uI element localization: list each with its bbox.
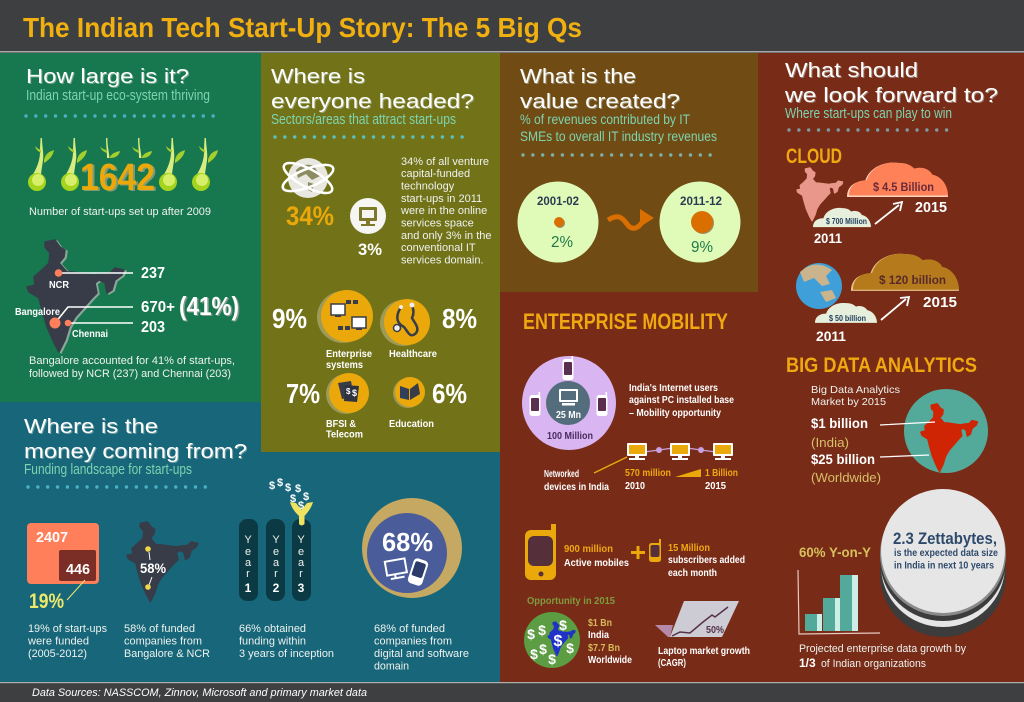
footer: data sources — [0, 682, 1024, 702]
heading: money — [24, 415, 247, 463]
chart: world cloud market: $ 50 billion — [829, 314, 866, 323]
dotted divider — [26, 114, 214, 118]
icon: funnel with dollars: $ — [303, 491, 309, 503]
text: big data market: (India) — [811, 435, 849, 450]
sector: education — [389, 377, 467, 430]
stat: 3 percent: 3% — [358, 240, 382, 259]
chart: year pills: Y — [244, 534, 252, 546]
dotted divider — [789, 128, 949, 132]
chart: funded share — [27, 523, 99, 613]
chart: networked devices: 2010 — [625, 480, 645, 492]
chart: year pills: a — [298, 557, 305, 569]
chart: networked devices: devices in India — [544, 481, 609, 493]
chart: 2001-02 circle: 2001-02 — [537, 194, 579, 208]
chart: internet users circle — [522, 356, 616, 450]
stat: opportunity figures — [588, 617, 632, 666]
stat: subscribers — [668, 542, 745, 579]
chart: networked devices — [544, 443, 738, 493]
sector: enterprise systems: 9% — [272, 303, 307, 334]
text: funding captions: (2005-2012) — [28, 648, 87, 660]
chart: 2011-12 circle: 2011-12 — [680, 194, 722, 208]
chart: year pills — [239, 519, 311, 601]
text: projected growth: Projected enterprise data growth by — [799, 643, 966, 655]
chart: year pills: 1 — [245, 581, 252, 595]
chart: networked devices: Networked — [544, 468, 579, 480]
sector: bfsi and telecom: $ — [352, 388, 357, 398]
stat: active mobiles: Active mobiles — [564, 557, 629, 569]
map: india hubs: (41%) — [179, 291, 239, 321]
icon: funnel with dollars: $ — [298, 500, 304, 512]
panel: where is the money coming from — [0, 402, 500, 683]
icon: green dollar globe: $ — [530, 646, 538, 662]
icon: monitor — [350, 198, 386, 234]
subtitle: Funding landscape for start-ups — [24, 461, 192, 478]
panel: what is the value created — [500, 53, 758, 292]
heading: forward — [784, 59, 998, 107]
subtitle: SMEs to overall IT industry revenues — [520, 128, 717, 144]
sector: bfsi and telecom: 7% — [286, 378, 320, 409]
icon: green dollar globe: $ — [548, 651, 556, 667]
dotted divider — [275, 135, 463, 139]
heading: headed — [271, 65, 474, 113]
icon: green dollar globe: $ — [539, 641, 547, 657]
map: bangalore and ncr: 58% — [140, 560, 167, 576]
chart: india cloud market: $ 700 Million — [826, 217, 867, 226]
text: online services: conventional IT — [401, 242, 476, 254]
chart: funded share: 446 — [66, 561, 90, 578]
text: funding captions: 19% of start-ups — [28, 623, 107, 635]
map: india hubs: 670+ — [141, 299, 175, 316]
text: internet vs pc: India's Internet users — [629, 382, 718, 394]
text: big data market: $25 billion — [811, 451, 875, 467]
heading: headed: Where is — [271, 65, 365, 88]
chart: year pills: e — [273, 546, 279, 558]
sector: enterprise systems: systems — [326, 359, 363, 371]
chart: networked devices: 1 Billion — [705, 468, 738, 479]
heading: headed: everyone headed? — [271, 90, 474, 113]
chart: world cloud market: $ 120 billion — [879, 273, 946, 287]
caption: laptop market — [658, 645, 750, 669]
text: big data market: $1 billion — [811, 415, 868, 431]
heading: how large: How large is it? — [26, 65, 189, 88]
heading: cloud: CLOUD — [786, 145, 842, 168]
text: internet vs pc: against PC installed base — [629, 394, 734, 406]
text: online services: services domain. — [401, 254, 484, 266]
big number 1642: 1642 — [80, 157, 155, 199]
stat: opportunity figures: $1 Bn — [588, 617, 612, 629]
text: funding captions: companies from — [374, 636, 452, 648]
text: projected growth — [799, 643, 966, 670]
heading: value: value created? — [520, 90, 680, 113]
stat: opportunity figures: $7.7 Bn — [588, 642, 620, 654]
text: big data market: (Worldwide) — [811, 470, 881, 485]
icon: laptop growth: 50% — [706, 624, 725, 636]
icon: funnel with dollars: $ — [269, 480, 275, 492]
heading: forward: we look forward to? — [784, 84, 998, 107]
icon: laptop growth — [655, 601, 739, 637]
chart: internet users circle: 25 Mn — [556, 409, 581, 421]
text: funding captions: Bangalore & NCR — [124, 648, 210, 660]
chart: 2011-12 circle: 9% — [691, 239, 713, 256]
chart: zettabyte disc stack: is the expected data size — [894, 548, 998, 559]
panel: enterprise mobility — [500, 292, 758, 683]
chart: enterprise data growth: 60% Y-on-Y — [799, 544, 872, 560]
title bar — [0, 0, 1024, 52]
subtitle: Where start-ups can play to win — [785, 105, 952, 122]
text: online services: capital-funded — [401, 168, 470, 180]
text: funding captions: funding within — [239, 636, 306, 648]
text: bangalore share: followed by NCR (237) and Chennai (203) — [29, 368, 231, 380]
chart: year pills: 2 — [273, 581, 280, 595]
chart: 68 percent circle: 68% — [382, 527, 433, 557]
icon: plus — [631, 546, 645, 559]
heading: big data: BIG DATA ANALYTICS — [786, 354, 977, 377]
sector: enterprise systems — [272, 290, 373, 371]
chart: networked devices: 2015 — [705, 480, 726, 492]
chart: zettabyte disc stack: in India in next 10 years — [894, 560, 994, 572]
text: online services: start-ups in 2011 — [401, 193, 482, 205]
text: projected growth: 1/3 — [799, 656, 816, 670]
sector: healthcare — [380, 299, 477, 360]
chart: year pills: r — [246, 568, 250, 580]
icon: small mobile — [649, 539, 661, 562]
map: india hubs: 203 — [141, 319, 165, 336]
sector: education: Education — [389, 418, 434, 430]
chart: india cloud market: 2015 — [915, 199, 947, 216]
chart: year pills: 3 — [298, 581, 305, 595]
text: funding captions: were funded — [27, 636, 89, 648]
chart: 68 percent circle — [362, 498, 462, 598]
chart: india cloud market — [797, 163, 948, 246]
chart: world cloud market: 2011 — [816, 328, 846, 344]
text: online services: 34% of all venture — [401, 156, 489, 168]
sector: education: 6% — [432, 378, 467, 409]
big number 1642: 1642 — [82, 158, 157, 200]
chart: 2001-02 circle: 2% — [551, 234, 573, 251]
icon: funnel with dollars: $ — [277, 477, 283, 489]
chart: year pills: Y — [297, 534, 305, 546]
sector: bfsi and telecom: Telecom — [326, 428, 363, 440]
caption: start-ups: Number of start-ups set up after 2009 — [29, 206, 211, 218]
chart: year pills: a — [273, 557, 280, 569]
heading: forward: What should — [785, 59, 918, 82]
panel: how large is it — [0, 53, 261, 402]
subtitle: Indian start-up eco-system thriving — [26, 87, 210, 104]
map: bangalore and ncr — [127, 522, 198, 602]
sector: enterprise systems: Enterprise — [326, 348, 372, 360]
chart: 2001-02 circle — [518, 182, 598, 262]
subtitle: Sectors/areas that attract start-ups — [271, 111, 456, 128]
chart: zettabyte disc stack: 2.3 Zettabytes, — [893, 529, 997, 548]
dotted divider — [523, 153, 711, 157]
chart: year pills: e — [298, 546, 304, 558]
stat: active mobiles — [564, 543, 629, 569]
map: india hubs — [15, 240, 240, 353]
icon: globe — [280, 157, 336, 199]
text: online services: and only 3% in the — [401, 230, 492, 242]
heading: money: money coming from? — [24, 440, 247, 463]
label: opportunity: Opportunity in 2015 — [527, 595, 615, 607]
icon: green dollar globe: $ — [559, 617, 567, 633]
chart: funded share: 19% — [29, 590, 64, 613]
chart: networked devices: 570 million — [625, 468, 671, 479]
text: big data market — [811, 384, 900, 485]
icon: funnel with dollars: $ — [285, 482, 291, 494]
chart: world cloud market: 2015 — [923, 294, 957, 311]
chart: internet users circle: 100 Million — [547, 430, 593, 442]
chart: year pills: r — [274, 568, 278, 580]
text: funding captions: companies from — [124, 636, 202, 648]
chart: year pills: e — [245, 546, 251, 558]
sector: healthcare: 8% — [442, 303, 477, 334]
map: india hubs: NCR — [49, 279, 69, 291]
chart: zettabyte disc stack — [880, 489, 1006, 637]
subtitle: % of revenues contributed by IT — [520, 111, 690, 127]
chart: india cloud market: 2011 — [814, 230, 842, 246]
heading: value: What is the — [520, 65, 636, 88]
caption: laptop market: (CAGR) — [658, 657, 686, 669]
arrow: growth squiggle — [608, 209, 654, 228]
stat: 34 percent: 34% — [286, 201, 334, 231]
stat: subscribers: subscribers added — [668, 554, 745, 566]
map: india hubs: Bangalore — [15, 306, 60, 318]
sector: bfsi and telecom: $ — [346, 387, 351, 396]
icon: funnel with dollars: $ — [290, 493, 296, 505]
chart: year pills: a — [245, 557, 252, 569]
text: funding captions: 68% of funded — [374, 623, 445, 635]
text: internet vs pc — [629, 382, 734, 419]
chart: world cloud market — [796, 254, 959, 344]
icon: green dollar globe: $ — [527, 626, 535, 642]
dotted divider — [28, 485, 207, 489]
text: online services: services space — [401, 218, 474, 230]
chart: funded share: 2407 — [36, 529, 68, 546]
text: bangalore share: Bangalore accounted for 41% of start-ups, — [29, 355, 235, 367]
panel: where is everyone headed — [261, 53, 500, 452]
map: india hubs: 237 — [141, 265, 165, 282]
icon: big mobile — [525, 524, 556, 580]
map: india hubs: (41%) — [180, 292, 240, 322]
icon: green dollar globe — [524, 612, 580, 668]
icon: green dollar globe: $ — [554, 633, 563, 650]
subtitle — [520, 111, 717, 144]
title bar: The Indian Tech Start-Up Story: The 5 Big Qs — [23, 12, 582, 43]
chart: india cloud market: $ 4.5 Billion — [873, 180, 934, 194]
text: online services — [400, 156, 492, 266]
text: funding captions: 3 years of inception — [239, 648, 334, 660]
text: funding captions: digital and software — [374, 648, 469, 660]
map: big data globe — [880, 389, 988, 473]
text: funding captions — [27, 623, 469, 672]
text: funding captions: 66% obtained — [239, 623, 306, 635]
heading: value — [520, 65, 680, 113]
text: big data market: Market by 2015 — [811, 396, 886, 408]
text: big data market: Big Data Analytics — [811, 384, 900, 396]
icon: green dollar globe: $ — [538, 622, 546, 638]
text: funding captions: domain — [374, 660, 409, 672]
panel: what should we look forward to — [758, 53, 1024, 683]
stat: opportunity figures: Worldwide — [588, 654, 632, 666]
sector: bfsi and telecom — [286, 373, 369, 440]
icon: green dollar globe: $ — [566, 640, 574, 656]
icon: sprouts — [28, 138, 218, 191]
map: india hubs: Chennai — [72, 328, 108, 340]
sector: bfsi and telecom: BFSI & — [326, 418, 356, 430]
footer: data sources: Data Sources: NASSCOM, Zinnov, Microsoft and primary market data — [32, 687, 367, 699]
stat: opportunity figures: India — [588, 629, 609, 641]
text: funding captions: 58% of funded — [124, 623, 195, 635]
stat: subscribers: 15 Million — [668, 542, 710, 554]
text: bangalore share — [29, 355, 235, 380]
chart: enterprise data growth — [798, 544, 880, 634]
text: internet vs pc: – Mobility opportunity — [629, 407, 721, 419]
text: online services: technology — [401, 180, 455, 192]
caption: laptop market: Laptop market growth — [658, 645, 750, 657]
icon: funnel with dollars: $ — [295, 483, 301, 495]
stat: active mobiles: 900 million — [564, 543, 613, 555]
icon: funnel with dollars — [269, 477, 313, 526]
sector: healthcare: Healthcare — [389, 348, 437, 360]
chart: 2011-12 circle — [660, 182, 740, 262]
heading: money: Where is the — [24, 415, 158, 438]
stat: subscribers: each month — [668, 567, 717, 579]
heading: enterprise mobility: ENTERPRISE MOBILITY — [523, 309, 728, 334]
text: online services: were in the online — [400, 205, 487, 217]
text: projected growth: of Indian organizations — [821, 658, 926, 670]
chart: year pills: r — [299, 568, 303, 580]
chart: year pills: Y — [272, 534, 280, 546]
